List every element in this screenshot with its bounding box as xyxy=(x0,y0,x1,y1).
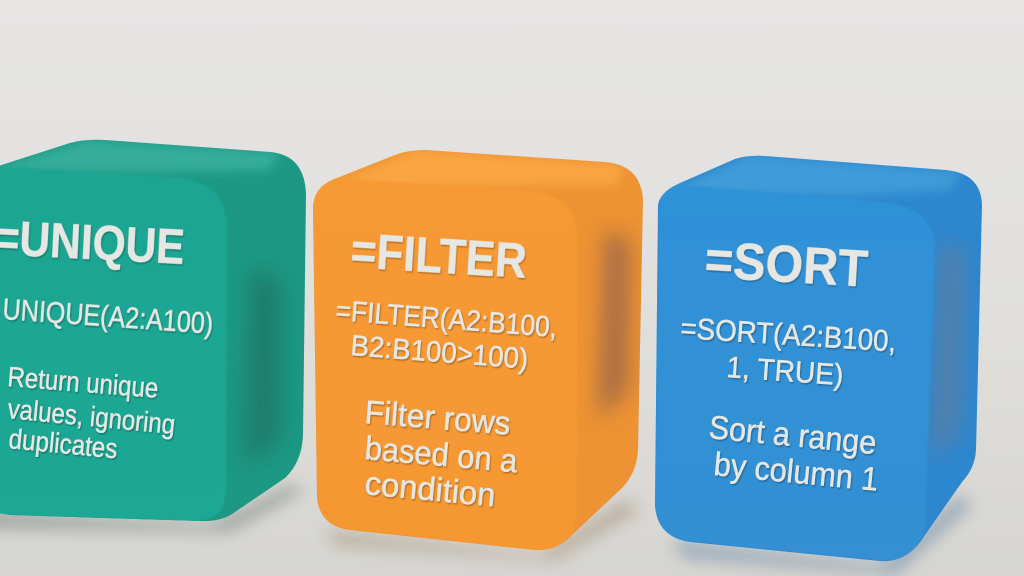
description: Filter rows xyxy=(363,393,512,442)
formula: =SORT(A2:B100, xyxy=(680,312,897,359)
side shading xyxy=(598,230,630,420)
top face xyxy=(0,140,280,172)
heading: =FILTER xyxy=(349,224,528,289)
front face xyxy=(0,165,227,521)
heading: =SORT xyxy=(703,231,870,299)
description: values, ignoring xyxy=(6,393,177,440)
description xyxy=(363,393,520,514)
shadow xyxy=(670,495,972,575)
formula xyxy=(334,295,558,376)
front face xyxy=(655,185,935,561)
formula xyxy=(680,312,897,392)
description: by column 1 xyxy=(712,445,880,498)
shadow xyxy=(0,485,305,532)
top face xyxy=(338,150,624,186)
side shading xyxy=(930,240,965,465)
shadow xyxy=(325,500,640,560)
formula: B2:B100>100) xyxy=(349,330,529,376)
top face xyxy=(658,155,960,195)
description: Sort a range xyxy=(707,408,878,461)
block: FILTER xyxy=(305,140,650,560)
block body xyxy=(650,150,990,570)
description: duplicates xyxy=(7,423,119,464)
description: based on a xyxy=(363,429,520,479)
block: UNIQUE xyxy=(0,130,320,532)
side shading xyxy=(245,270,280,465)
block: SORT xyxy=(650,150,990,575)
description: condition xyxy=(363,464,497,514)
block body xyxy=(0,130,320,530)
description xyxy=(6,361,177,464)
formula: =FILTER(A2:B100, xyxy=(334,295,558,344)
formula: UNIQUE(A2:A100) xyxy=(2,293,214,341)
description: Return unique xyxy=(7,361,159,404)
block body xyxy=(305,140,650,560)
infographic scene xyxy=(0,140,1024,576)
front face xyxy=(313,178,577,550)
formula: 1, TRUE) xyxy=(726,351,845,392)
heading: =UNIQUE xyxy=(0,211,186,275)
description xyxy=(707,408,880,498)
